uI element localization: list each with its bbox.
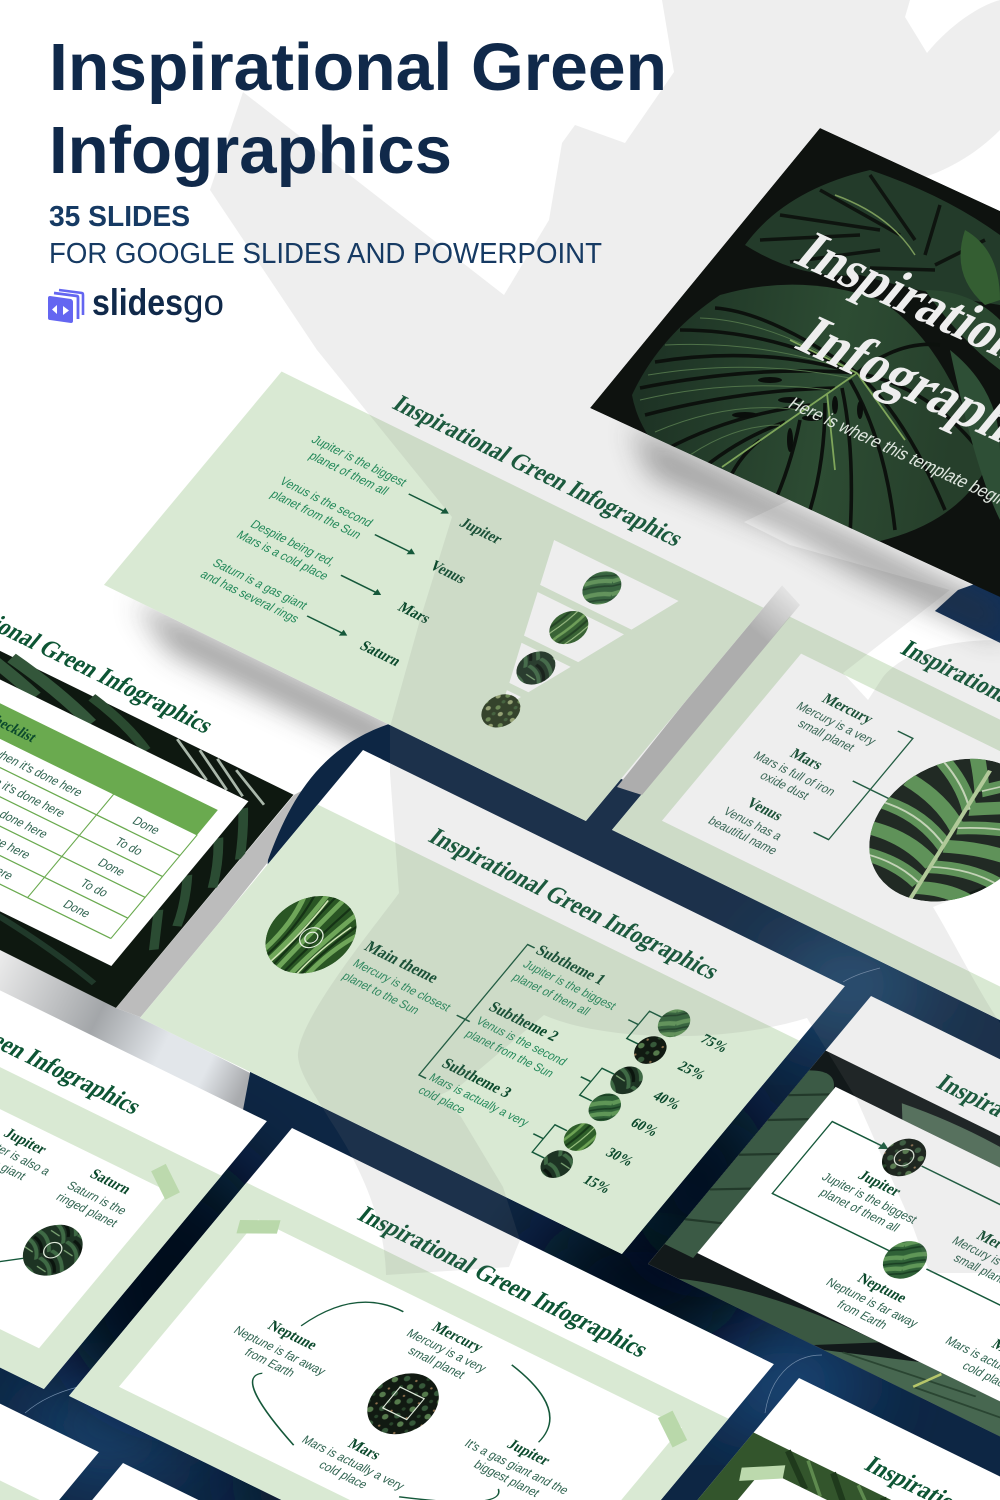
green frame — [612, 617, 1000, 1066]
percentage labels: 25% — [674, 1059, 709, 1084]
checklist status labels: To do — [77, 876, 112, 900]
page title — [49, 30, 667, 188]
arrow head into Jupiter — [878, 1142, 891, 1153]
Neptune circle photo — [874, 1235, 936, 1285]
Jupiter text: Jupiter — [503, 1437, 554, 1469]
Saturn photo circle — [11, 1216, 95, 1284]
percentage labels — [579, 1031, 732, 1197]
Saturn row: and has several rings — [197, 567, 302, 626]
green frame — [69, 1183, 728, 1500]
tree slide title: Inspirational Green Infographics — [423, 823, 725, 985]
Jupiter circle photo — [873, 1132, 935, 1183]
Venus text: Venus has a — [720, 804, 785, 843]
shadow under green slide — [135, 600, 395, 760]
green panel — [140, 805, 799, 1254]
Jupiter text: planet of them all — [817, 1186, 903, 1234]
Venus text — [705, 787, 803, 858]
corner slide green panel — [0, 1271, 53, 1500]
compatibility subtitle: FOR GOOGLE SLIDES AND POWERPOINT — [49, 238, 602, 270]
white inner panel — [0, 983, 169, 1348]
Jupiter text — [452, 1422, 584, 1500]
slide: bottom right grass photo — [576, 1378, 1000, 1500]
slide: funnel with arrows — [104, 317, 809, 821]
Mars text: Mars — [786, 746, 826, 773]
Saturn text: Saturn — [86, 1167, 135, 1198]
subtheme 1 text: planet of them all — [509, 971, 593, 1018]
Mars text: Mars is full of iron — [750, 749, 839, 799]
checklist status labels: To do — [112, 835, 146, 858]
Mars text: Mars — [344, 1436, 384, 1463]
Venus text: Venus — [743, 795, 786, 824]
Jupiter row: planet of them all — [306, 449, 392, 498]
Venus row: planet from the Sun — [267, 487, 365, 542]
Mercury text: small planet — [405, 1344, 469, 1382]
Jupiter text: It's a gas giant and the — [462, 1436, 572, 1497]
bottom right tape — [739, 1465, 785, 1481]
Mercury text — [783, 684, 891, 760]
Mars text: cold place — [316, 1458, 371, 1492]
percentage labels: 40% — [649, 1088, 684, 1113]
Neptune text: from Earth — [242, 1345, 298, 1380]
navy patch right of the stripe — [925, 575, 1000, 650]
checklist white card — [0, 593, 248, 966]
Mercury text — [939, 1221, 1000, 1294]
icon: slidesgo logo — [48, 290, 83, 323]
slide: bottom edge — [0, 1463, 605, 1500]
Venus row — [266, 474, 475, 591]
slide: Jupiter and Saturn — [0, 885, 267, 1389]
circle icon — [40, 1240, 66, 1261]
main theme text — [338, 937, 470, 1027]
cover foliage — [632, 170, 1000, 545]
subtheme 2 text — [462, 998, 583, 1081]
funnel segments — [438, 540, 679, 740]
Saturn row: Saturn is a gas giant — [210, 556, 311, 613]
centre photo circle — [353, 1363, 453, 1445]
percentage labels: 75% — [697, 1031, 732, 1056]
navy backdrop — [0, 680, 1000, 1500]
Venus row: Venus — [426, 558, 469, 587]
Saturn row — [197, 555, 410, 674]
Neptune text — [221, 1307, 342, 1390]
subtheme 3 text: Mars is actually a very — [426, 1071, 532, 1129]
bottom right white panel — [625, 1469, 1000, 1500]
Jupiter text: Jupiter is the biggest — [819, 1170, 921, 1227]
grass photo — [576, 1433, 1000, 1500]
slide: cover photo — [590, 128, 1000, 638]
percentage labels: 60% — [627, 1115, 662, 1140]
Mercury text: Mercury is a very — [793, 699, 879, 748]
Mars row: Despite being red, — [247, 517, 338, 569]
percentage labels: 30% — [602, 1145, 637, 1170]
slide: lower right photo with planets — [648, 996, 1000, 1500]
big leaf photo background — [648, 1051, 1000, 1500]
cycle arcs — [225, 1279, 579, 1500]
slide: cycle diagram — [69, 1128, 774, 1500]
shadow gradient under checklist slide — [0, 950, 268, 1125]
value photo circles — [533, 1004, 697, 1183]
bracket — [811, 730, 940, 853]
funnel photo circles — [472, 566, 630, 733]
Mars row: Mars — [394, 600, 434, 627]
checklist table grid — [0, 642, 197, 938]
Mars text: Mars is actually a very — [299, 1433, 408, 1493]
Venus text: beautiful name — [705, 814, 781, 858]
subtheme 2 text: Subtheme 2 — [485, 999, 562, 1045]
Saturn text — [53, 1161, 145, 1230]
subtheme 3 text — [415, 1055, 545, 1142]
top right tape — [658, 1411, 687, 1447]
Mars row — [234, 515, 440, 631]
checklist task labels — [0, 721, 86, 883]
subtheme 1 text: Jupiter is the biggest — [520, 958, 619, 1013]
big monstera leaf circle — [869, 758, 1000, 902]
Saturn text: ringed planet — [53, 1190, 121, 1230]
Jupiter circle icon — [890, 1146, 918, 1169]
Neptune text: Neptune is far away — [823, 1275, 921, 1330]
Neptune text: Neptune — [854, 1271, 910, 1306]
Mars row: Mars is a cold place — [234, 528, 332, 583]
main theme text: Mercury is the closest — [350, 957, 454, 1014]
Jupiter text: biggest planet — [471, 1458, 543, 1500]
value brackets — [522, 1006, 662, 1158]
white inner panel — [119, 1220, 682, 1500]
cycle slide title: Inspirational Green Infographics — [352, 1201, 654, 1363]
main theme photo circle — [266, 896, 356, 974]
subtheme 3 text: cold place — [415, 1084, 469, 1117]
Mercury text: small planet — [795, 717, 858, 755]
tape strip — [151, 1164, 180, 1200]
green frame — [0, 940, 221, 1389]
slide: bottom left corner — [0, 1216, 99, 1500]
green panel — [104, 372, 763, 821]
main theme text: planet to the Sun — [339, 970, 422, 1017]
slide count: 35 SLIDES — [49, 201, 190, 233]
inner panel — [662, 654, 1000, 1027]
Jupiter text: Jupiter — [0, 1126, 50, 1158]
subtheme 2 text: Venus is the second — [473, 1015, 570, 1068]
checklist table header — [0, 617, 218, 835]
checklist status labels — [60, 814, 164, 921]
page title: Infographics — [49, 113, 452, 188]
slide: Mercury Mars Venus with big leaf — [612, 611, 1000, 1020]
slide: main theme tree — [140, 750, 845, 1254]
shadow band beside checklist slide — [116, 770, 339, 1018]
Jupiter row: Jupiter is the biggest — [308, 433, 411, 489]
Neptune text: from Earth — [834, 1297, 890, 1332]
subtheme 2 text: planet from the Sun — [462, 1028, 557, 1080]
grey leaf silhouette overlay — [210, 0, 1000, 1275]
slide: checklist table — [0, 504, 339, 1008]
loop connector line — [772, 1122, 1000, 1407]
Jupiter row — [298, 433, 512, 551]
shadow under cover slide — [630, 425, 1000, 640]
main theme text: Main theme — [361, 937, 443, 987]
checklist status labels: Done — [95, 856, 129, 879]
Mars text — [932, 1319, 1000, 1406]
Mercury text: Mercury — [818, 691, 877, 728]
top left tape — [236, 1220, 281, 1234]
subtheme 1 text — [509, 942, 633, 1026]
Neptune text — [813, 1261, 933, 1342]
Jupiter row: Jupiter — [456, 515, 506, 548]
Neptune text: Neptune — [264, 1318, 321, 1354]
Venus row: Venus is the second — [277, 474, 376, 530]
white content panel — [697, 1087, 1000, 1460]
Mercury text — [394, 1312, 501, 1387]
tree bracket — [410, 940, 535, 1078]
connector line — [0, 1236, 26, 1290]
Jupiter text — [809, 1156, 933, 1239]
Mars text: oxide dust — [757, 769, 813, 803]
Mercury text: Mercury is a very — [404, 1326, 490, 1375]
Saturn row: Saturn — [356, 638, 404, 670]
slidesgo wordmark: slides — [92, 282, 183, 323]
checklist status labels: Done — [60, 897, 94, 921]
Mars text — [289, 1419, 419, 1500]
subtheme 1 text: Subtheme 1 — [532, 942, 609, 988]
Jupiter text — [0, 1118, 65, 1190]
Saturn text: Saturn is the — [64, 1178, 130, 1218]
Mars text — [741, 734, 851, 811]
subtheme 3 text: Subtheme 3 — [438, 1055, 515, 1101]
checklist status labels: Done — [130, 814, 163, 837]
page title: Inspirational Green — [49, 30, 667, 105]
Mercury text: Mercury — [428, 1320, 487, 1356]
funnel slide title: Inspirational Green Infographics — [387, 390, 689, 552]
Jupiter text: Jupiter — [854, 1168, 904, 1200]
checklist photo background — [0, 559, 293, 1008]
slidesgo wordmark: go — [183, 282, 224, 323]
centre circle icon — [383, 1387, 424, 1420]
Neptune text: Neptune is far away — [231, 1323, 329, 1378]
shadow stripe between slides — [617, 583, 800, 795]
percentage labels: 15% — [579, 1172, 614, 1197]
